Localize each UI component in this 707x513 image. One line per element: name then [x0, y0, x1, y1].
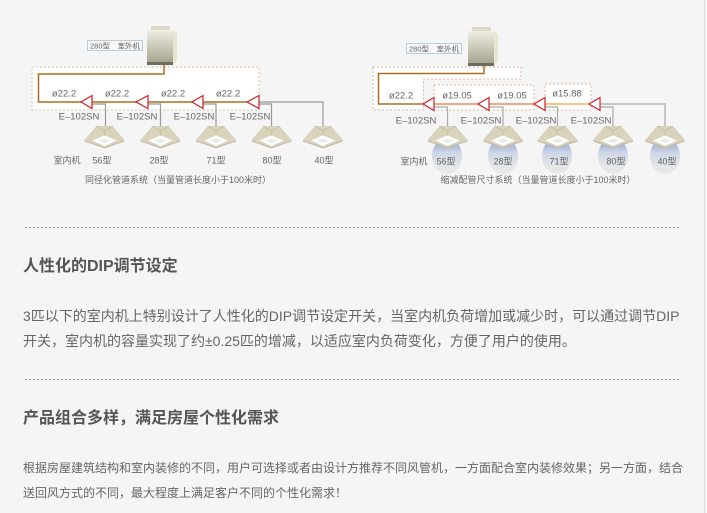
text: product combinations description — [23, 461, 683, 500]
joint model labels: E–102SN — [516, 116, 556, 126]
joint model labels — [396, 116, 611, 126]
reduced pipes — [378, 66, 589, 104]
pipe diameter labels: ø22.2 — [52, 88, 76, 100]
joint model labels — [59, 112, 270, 122]
joint model labels: E–102SN — [117, 112, 157, 122]
pipe diameter labels: ø22.2 — [105, 88, 129, 100]
text: DIP adjustment description: 开关，室内机的容量实现了约±0.25匹的增减，以适应室内负荷变化，方便了用户的使用。 — [23, 333, 576, 349]
pipe diameter labels: ø19.05 — [442, 90, 472, 102]
joint model labels: E–102SN — [571, 116, 611, 126]
branch joints — [423, 98, 600, 110]
outdoor unit label: 280型 室外机 — [409, 44, 460, 54]
indoor unit labels — [400, 156, 677, 166]
indoor unit labels: 56型 — [436, 156, 456, 166]
indoor unit labels: 71型 — [549, 156, 569, 166]
outdoor unit — [147, 26, 177, 65]
indoor unit labels: 56型 — [92, 156, 112, 166]
joint model labels: E–102SN — [461, 116, 501, 126]
pipe diameter labels: ø22.2 — [389, 90, 413, 102]
indoor unit labels: 71型 — [206, 156, 226, 166]
indoor unit labels — [53, 154, 334, 166]
branch pipes — [434, 104, 665, 127]
diagram: reduced pipe size system — [373, 27, 685, 185]
indoor unit labels: 40型 — [657, 156, 677, 166]
pipe diameter labels — [52, 88, 240, 100]
text: product combinations description: 根据房屋建筑结构和室内装修的不同，用户可选择或者由设计方推荐不同风管机，一方面配合室内装修效果；另一方面，结合 — [23, 461, 683, 475]
indoor unit labels: 40型 — [314, 156, 334, 166]
pipe diameter labels — [389, 88, 582, 102]
indoor unit labels: 80型 — [262, 156, 282, 166]
diagram: uniform pipe system — [32, 26, 343, 185]
pipe diagrams — [32, 26, 685, 185]
pipe diameter labels: ø22.2 — [216, 88, 240, 100]
joint model labels: E–102SN — [59, 112, 99, 122]
joint model labels: E–102SN — [230, 112, 270, 122]
branch joints — [81, 96, 259, 108]
heading: DIP adjustment: 人性化的DIP调节设定 — [23, 258, 178, 275]
indoor units — [84, 126, 343, 148]
dashed pipe zone — [32, 67, 259, 110]
indoor unit labels: 室内机 — [400, 156, 428, 166]
text: DIP adjustment description: 3匹以下的室内机上特别设计了人性化的DIP调节设定开关，当室内机负荷增加或减少时，可以通过调节DIP — [23, 308, 679, 324]
heading: product combinations: 产品组合多样，满足房屋个性化需求 — [23, 410, 279, 427]
pipe diameter labels: ø15.88 — [552, 88, 582, 100]
pipe diameter labels: ø22.2 — [161, 88, 185, 100]
joint model labels: E–102SN — [396, 116, 436, 126]
refrigerant pipe — [38, 65, 247, 102]
indoor unit labels: 28型 — [149, 156, 169, 166]
airflow ellipses — [432, 138, 680, 174]
text: DIP adjustment description — [23, 308, 679, 349]
caption: 缩减配管尺寸系统（当量管道长度小于100米时） — [440, 174, 636, 185]
branch pipes — [92, 102, 323, 127]
joint model labels: E–102SN — [174, 112, 214, 122]
outdoor unit label: 280型 室外机 — [90, 40, 141, 50]
pipe diameter labels: ø19.05 — [497, 90, 527, 102]
indoor unit labels: 28型 — [493, 156, 513, 166]
outdoor unit — [468, 27, 498, 66]
indoor units — [428, 126, 685, 148]
text: product combinations description: 送回风方式的不同，最大程度上满足客户不同的个性化需求！ — [23, 486, 347, 500]
dashed pipe zones — [373, 67, 591, 110]
indoor unit labels: 室内机 — [53, 154, 81, 166]
caption: 同径化管道系统（当量管道长度小于100米时） — [85, 174, 271, 185]
indoor unit labels: 80型 — [606, 156, 626, 166]
